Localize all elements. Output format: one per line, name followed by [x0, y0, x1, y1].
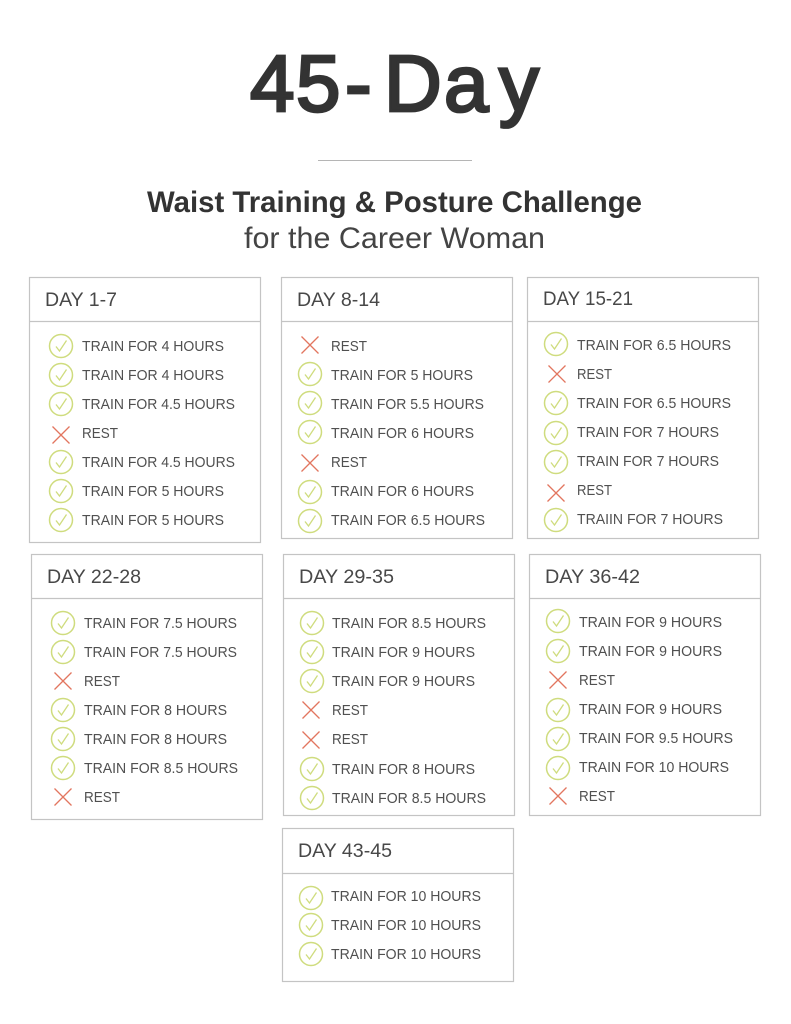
row 5 — [52, 728, 227, 750]
row 2 — [50, 364, 224, 386]
row 2: REST — [577, 367, 612, 383]
row 4: TRAIN FOR 7 HOURS — [577, 425, 719, 441]
row 6 — [548, 483, 612, 502]
row 7 — [54, 788, 120, 806]
row 5: TRAIN FOR 7 HOURS — [577, 454, 719, 470]
row 1: TRAIN FOR 7.5 HOURS — [84, 616, 237, 632]
heading: day 15-21: DAY 15-21 — [543, 289, 633, 310]
row 3: TRAIN FOR 5.5 HOURS — [331, 397, 484, 413]
panel: day 22-28 — [32, 554, 262, 820]
row 3 — [544, 392, 731, 414]
row 2 — [548, 366, 612, 383]
heading: day 36-42: DAY 36-42 — [545, 567, 640, 588]
row 1: TRAIN FOR 4 HOURS — [82, 339, 224, 355]
row 6 — [52, 756, 238, 780]
row 7 — [550, 788, 615, 805]
row 1: TRAIN FOR 8.5 HOURS — [332, 616, 486, 632]
row 3: REST — [579, 673, 615, 689]
row 1 — [546, 610, 722, 632]
row 1 — [50, 334, 224, 358]
row 3: TRAIN FOR 9 HOURS — [332, 674, 475, 690]
row 1 — [52, 612, 237, 634]
row 1 — [544, 332, 731, 356]
row 5 — [302, 732, 368, 748]
row 7 — [300, 786, 486, 810]
row 7: REST — [579, 789, 615, 805]
row 2 — [300, 640, 475, 664]
panel: day 36-42 — [530, 554, 760, 816]
row 5: REST — [332, 732, 368, 748]
heading: day 22-28: DAY 22-28 — [47, 567, 141, 588]
row 4: REST — [332, 703, 368, 719]
row 2: TRAIN FOR 9 HOURS — [332, 645, 475, 661]
row 6 — [50, 480, 224, 502]
row 3 — [300, 670, 475, 692]
row 3 — [298, 392, 484, 414]
row 7: TRAIIN FOR 7 HOURS — [577, 512, 723, 528]
row 2 — [300, 914, 481, 936]
row 6 — [300, 758, 475, 780]
row 3 — [50, 392, 235, 416]
row 4 — [52, 698, 227, 722]
row 7 — [544, 508, 723, 532]
row 3: REST — [84, 674, 120, 690]
row 5: TRAIN FOR 4.5 HOURS — [82, 455, 235, 471]
row 1: TRAIN FOR 6.5 HOURS — [577, 338, 731, 354]
row 6: TRAIN FOR 10 HOURS — [579, 760, 729, 776]
row 1: TRAIN FOR 9 HOURS — [579, 615, 722, 631]
row 2: TRAIN FOR 4 HOURS — [82, 368, 224, 384]
row 1 — [300, 886, 481, 910]
row 7: REST — [84, 790, 120, 806]
row 7 — [50, 508, 224, 532]
subtitle: Waist Training & Posture Challenge — [147, 186, 642, 219]
row 5 — [546, 728, 733, 750]
row 2 — [546, 640, 722, 662]
row 4 — [298, 420, 474, 444]
row 6 — [546, 756, 729, 780]
row 5: TRAIN FOR 8 HOURS — [84, 732, 227, 748]
title: 45-Day — [250, 39, 539, 128]
row 5 — [50, 450, 235, 474]
row 2: TRAIN FOR 7.5 HOURS — [84, 645, 237, 661]
row 6: TRAIN FOR 5 HOURS — [82, 484, 224, 500]
panel: day 8-14 — [282, 278, 512, 538]
row 6: TRAIN FOR 6 HOURS — [331, 484, 474, 500]
row 2: TRAIN FOR 10 HOURS — [331, 918, 481, 934]
row 4: TRAIN FOR 6 HOURS — [331, 426, 474, 442]
panel: day 15-21 — [528, 278, 758, 538]
subtitle second line: for the Career Woman — [244, 222, 545, 255]
row 7: TRAIN FOR 8.5 HOURS — [332, 791, 486, 807]
row 3 — [54, 672, 120, 690]
row 1 — [302, 336, 367, 355]
row 2: TRAIN FOR 5 HOURS — [331, 368, 473, 384]
row 4 — [302, 702, 368, 719]
row 5: TRAIN FOR 9.5 HOURS — [579, 731, 733, 747]
heading: day 1-7: DAY 1-7 — [45, 290, 117, 311]
row 2: TRAIN FOR 9 HOURS — [579, 644, 722, 660]
heading: day 8-14: DAY 8-14 — [297, 290, 380, 311]
panel: day 29-35 — [284, 554, 514, 816]
row 2 — [52, 640, 237, 664]
row 4: TRAIN FOR 8 HOURS — [84, 703, 227, 719]
row 7 — [298, 510, 485, 532]
row 1: TRAIN FOR 10 HOURS — [331, 889, 481, 905]
row 2 — [298, 362, 473, 386]
row 3 — [550, 672, 615, 689]
row 4: REST — [82, 426, 118, 442]
heading: day 43-45: DAY 43-45 — [298, 841, 392, 862]
row 6: TRAIN FOR 8.5 HOURS — [84, 761, 238, 777]
row 6: TRAIN FOR 8 HOURS — [332, 762, 475, 778]
row 7: TRAIN FOR 5 HOURS — [82, 513, 224, 529]
row 5 — [544, 450, 719, 474]
row 6: REST — [577, 483, 612, 499]
row 5: REST — [331, 455, 367, 471]
panel: day 1-7 — [30, 278, 260, 542]
row 1 — [300, 612, 486, 634]
panel: day 43-45 — [282, 828, 514, 982]
row 6 — [298, 480, 474, 504]
row 3: TRAIN FOR 6.5 HOURS — [577, 396, 731, 412]
row 3: TRAIN FOR 10 HOURS — [331, 947, 481, 963]
row 4 — [544, 422, 719, 444]
row 3: TRAIN FOR 4.5 HOURS — [82, 397, 235, 413]
row 1: REST — [331, 339, 367, 355]
row 4 — [52, 426, 118, 444]
row 4: TRAIN FOR 9 HOURS — [579, 702, 722, 718]
row 4 — [546, 698, 722, 722]
row 5 — [302, 454, 367, 472]
heading: day 29-35: DAY 29-35 — [299, 567, 394, 588]
row 7: TRAIN FOR 6.5 HOURS — [331, 513, 485, 529]
row 3 — [300, 942, 481, 966]
